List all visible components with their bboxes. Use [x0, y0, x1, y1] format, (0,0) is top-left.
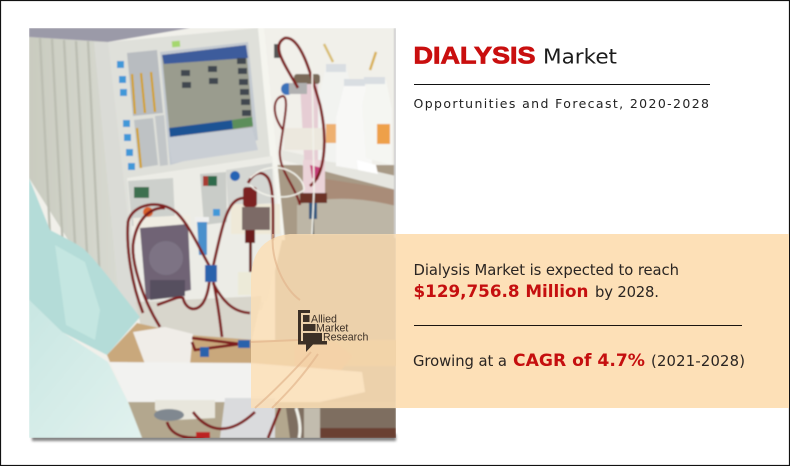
screen footer: [169, 120, 233, 137]
armrest: [110, 362, 365, 402]
CAGR period: (2021-2028): [651, 353, 745, 370]
lower module panels: [128, 163, 274, 226]
green indicator: [172, 41, 180, 47]
right edge post: [394, 28, 396, 238]
machine front face: [110, 28, 270, 240]
shelf: [282, 150, 396, 190]
lower floor strip: [135, 296, 262, 340]
floor: [128, 401, 290, 438]
pale chair: [297, 199, 396, 235]
machine corner column: [94, 42, 140, 320]
gown highlight: [55, 245, 100, 340]
title: DIALYSIS: DIALYSIS: [414, 42, 536, 70]
armrest clamp: [155, 400, 215, 420]
screen green tab: [232, 117, 253, 129]
background lower room: [275, 164, 396, 402]
logo wordmark: Allied: [311, 314, 337, 326]
patient gown: [29, 178, 140, 355]
blood tubes: [128, 38, 324, 438]
arm: [107, 323, 400, 366]
bandage: [133, 327, 193, 364]
market year: by 2028.: [595, 284, 659, 301]
title rule: [414, 84, 710, 85]
pale pole: [304, 408, 320, 438]
translucent info panel over photo: [251, 234, 396, 408]
screen header: [162, 45, 248, 64]
monitor screen: [162, 57, 254, 133]
floor light panel: [220, 398, 275, 438]
red-brown floor: [315, 428, 396, 438]
machine side panel: [29, 36, 118, 288]
logo icon: [298, 310, 327, 352]
right dark floor: [286, 408, 396, 438]
photo: dialysis machine and patient: [29, 28, 400, 438]
screen labels: [181, 58, 251, 116]
machine lower module: [127, 156, 282, 305]
market size text: [414, 262, 679, 301]
armrest clamp knob: [154, 409, 184, 421]
brick wall: [326, 180, 394, 204]
keypad: [190, 141, 258, 160]
side panel ribs: [40, 38, 100, 282]
blood chamber and clamp: [231, 187, 280, 295]
CAGR value: CAGR of 4.7%: [513, 351, 645, 370]
hand: [295, 342, 352, 372]
market value: $129,756.8 Million: [414, 282, 588, 301]
tubes seen through panel: [251, 234, 318, 408]
blood pump: [133, 207, 209, 300]
CAGR lead-in: Growing at a: [413, 353, 507, 370]
red floor clamp: [196, 432, 210, 438]
machine right edge: [264, 85, 286, 240]
logo: Allied Market Research: [298, 310, 368, 352]
blue tube connectors: [200, 265, 250, 357]
CAGR text: [413, 351, 745, 370]
photo background wall: [31, 28, 394, 384]
subtitle: Opportunities and Forecast, 2020-2028: [414, 96, 709, 111]
blue buttons: [117, 61, 135, 170]
gauge panel: [127, 50, 168, 168]
photo shadow: [32, 434, 396, 441]
market size line one: Dialysis Market is expected to reach: [414, 262, 679, 279]
white tube lines: [250, 60, 314, 438]
screen area: [160, 42, 258, 165]
logo wordmark: Market: [316, 322, 348, 334]
machine lid: [29, 28, 190, 42]
bed sheet: [29, 300, 142, 438]
saline bottles: [318, 44, 392, 174]
info panel right part: [396, 234, 789, 408]
title: Market: Market: [543, 44, 617, 68]
panel rule: [414, 325, 742, 326]
logo wordmark: Research: [323, 332, 368, 344]
drip chamber column: [274, 44, 327, 235]
